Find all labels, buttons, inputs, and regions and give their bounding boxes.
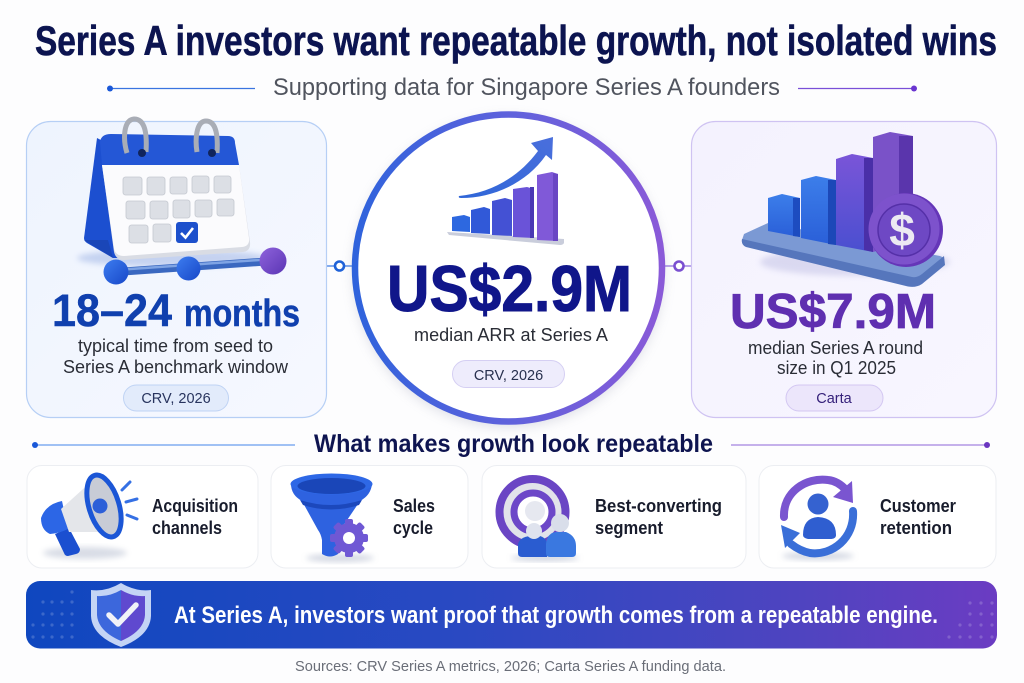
- label: Best-converting: [595, 496, 722, 516]
- icon: funnel with gear: [290, 474, 374, 562]
- label: [595, 496, 722, 538]
- source pill: CRV, 2026: [124, 385, 228, 411]
- icon: megaphone: [41, 471, 137, 559]
- label: [393, 496, 435, 538]
- card: acquisition channels: [27, 466, 258, 568]
- icon: timeline slider: [104, 248, 286, 284]
- source pill: CRV, 2026: CRV, 2026: [141, 391, 211, 407]
- description: [748, 338, 923, 378]
- icon: calendar: [77, 119, 267, 267]
- icon: target with people: [500, 479, 579, 561]
- description: [63, 336, 289, 377]
- sources footnote: Sources: CRV Series A metrics, 2026; Carta Series A funding data.: [295, 658, 726, 675]
- label: Acquisition: [152, 496, 238, 516]
- description: median ARR at Series A: [414, 325, 608, 345]
- icon: bars and coin on platform: $: [889, 204, 915, 256]
- icon: growth bars with arrow: [447, 137, 564, 245]
- label: segment: [595, 518, 663, 538]
- description: Series A benchmark window: [63, 357, 289, 377]
- source pill: Carta: Carta: [816, 391, 853, 407]
- description: median Series A round: [748, 338, 923, 358]
- decorative dot grids: [31, 590, 994, 639]
- stat: US$7.9M: US$7.9M: [730, 285, 936, 339]
- label: Sales: [393, 496, 435, 516]
- label: cycle: [393, 518, 433, 538]
- subtitle with side rules: [107, 74, 917, 101]
- card: sales cycle: [271, 466, 468, 568]
- source pill: CRV, 2026: [452, 360, 564, 388]
- card: best-converting segment: [482, 466, 746, 568]
- card: customer retention: [759, 466, 996, 568]
- connector right: [662, 262, 692, 270]
- section heading with side rules: [32, 430, 990, 458]
- section heading with side rules: What makes growth look repeatable: [314, 430, 713, 458]
- stat: US$2.9M: US$2.9M: [387, 252, 632, 325]
- description: typical time from seed to: [78, 336, 273, 356]
- panel: median ARR circle: [354, 114, 664, 427]
- subtitle with side rules: Supporting data for Singapore Series A founders: [273, 74, 780, 101]
- icon: bars and coin on platform: [742, 132, 950, 287]
- source pill: Carta: [786, 385, 883, 411]
- label: retention: [880, 518, 952, 538]
- takeaway banner: [26, 581, 997, 648]
- label: channels: [152, 518, 222, 538]
- panel: seed to Series A timing: [26, 119, 326, 418]
- panel: median round size: [692, 122, 996, 418]
- label: [880, 496, 956, 538]
- source pill: CRV, 2026: CRV, 2026: [474, 368, 543, 384]
- stat: 18–24 months: months: [184, 293, 300, 335]
- label: Customer: [880, 496, 956, 516]
- icon: retention loop with person: [781, 480, 854, 560]
- icon: shield with check: [91, 583, 151, 647]
- stat: 18–24 months: 18–24: [52, 285, 172, 336]
- label: [152, 496, 238, 538]
- description: size in Q1 2025: [777, 358, 896, 378]
- connector left: [327, 262, 354, 270]
- stat: 18–24 months: [52, 285, 300, 336]
